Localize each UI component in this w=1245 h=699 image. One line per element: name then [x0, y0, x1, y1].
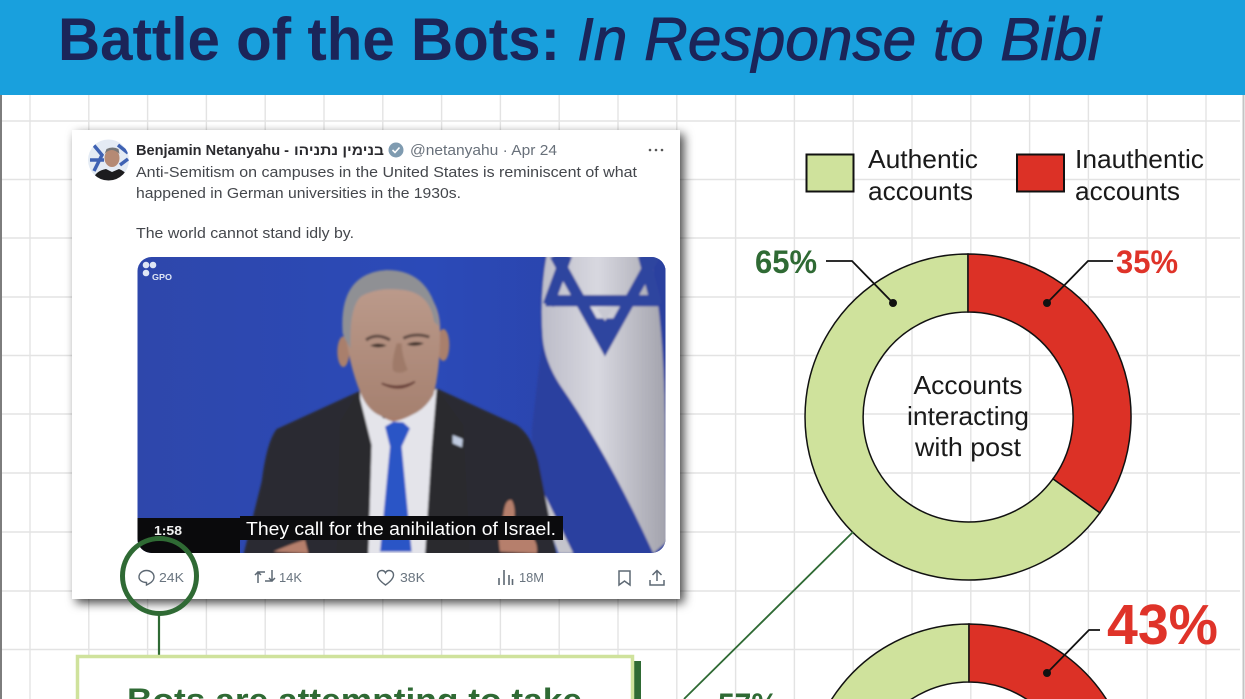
title: In Response to Bibi — [577, 6, 1103, 73]
tweet author line: בנימין נתניהו — [294, 142, 384, 158]
engagement stats: 38K — [400, 570, 425, 585]
connector: circle to callout — [158, 614, 160, 656]
donut center label: Accounts — [914, 370, 1022, 400]
donut center label: with post — [914, 432, 1022, 462]
label: 65%: 65% — [755, 244, 817, 280]
callout box — [78, 656, 632, 699]
donut chart: accounts interacting with post — [805, 254, 1131, 580]
tweet text — [136, 165, 637, 242]
label: 43%: 43% — [1107, 593, 1218, 657]
lower black band — [137, 518, 240, 553]
engagement stats: 18M — [519, 570, 544, 585]
icon: repost — [255, 570, 275, 583]
caption — [240, 516, 563, 540]
video still: They call for the anihilation of Israel. — [246, 518, 556, 539]
legend: inauthentic: accounts — [1075, 176, 1180, 206]
icon: like — [378, 570, 394, 585]
legend: authentic: accounts — [868, 176, 973, 206]
icon: share — [650, 570, 664, 585]
GPO mark: GPO — [152, 272, 172, 282]
video still: 1:58 — [154, 523, 182, 538]
callout shadow bar — [633, 661, 641, 699]
legend: inauthentic: Inauthentic — [1075, 144, 1204, 174]
icon: views — [499, 570, 512, 585]
label: 43% — [1043, 593, 1218, 677]
video still — [137, 255, 670, 555]
engagement stats: 24K — [159, 570, 184, 585]
header banner — [0, 0, 1245, 95]
GPO mark — [143, 262, 172, 282]
tweet text: The world cannot stand idly by. — [136, 226, 354, 242]
duration — [151, 522, 185, 540]
legend: authentic: Authentic — [868, 144, 978, 174]
highlight circle on replies — [122, 538, 196, 614]
donut center label: interacting — [907, 401, 1029, 431]
label: 35% — [1043, 244, 1178, 307]
engagement stats — [139, 570, 664, 585]
tweet text: happened in German universities in the 1930s. — [136, 186, 461, 202]
label: 65% — [755, 244, 897, 307]
tweet author line — [136, 142, 663, 159]
icon: reply — [139, 570, 154, 585]
icon: avatar — [88, 139, 130, 183]
legend — [806, 144, 1204, 206]
legend: authentic — [806, 144, 978, 206]
panel: tweet card — [72, 130, 680, 599]
engagement stats: 14K — [279, 570, 302, 585]
donut chart: second breakdown — [806, 624, 1132, 699]
tweet author line: @netanyahu · Apr 24 — [410, 143, 557, 159]
connector: callout to donut — [684, 532, 853, 699]
title: Battle of the Bots: — [58, 6, 560, 73]
icon: bookmark — [619, 571, 630, 585]
tweet author line: Benjamin Netanyahu - — [136, 143, 289, 159]
tweet text: Anti-Semitism on campuses in the United States is reminiscent of what — [136, 165, 637, 181]
legend: inauthentic — [1017, 144, 1204, 206]
label: 35%: 35% — [1116, 244, 1178, 280]
donut center label — [907, 370, 1029, 462]
